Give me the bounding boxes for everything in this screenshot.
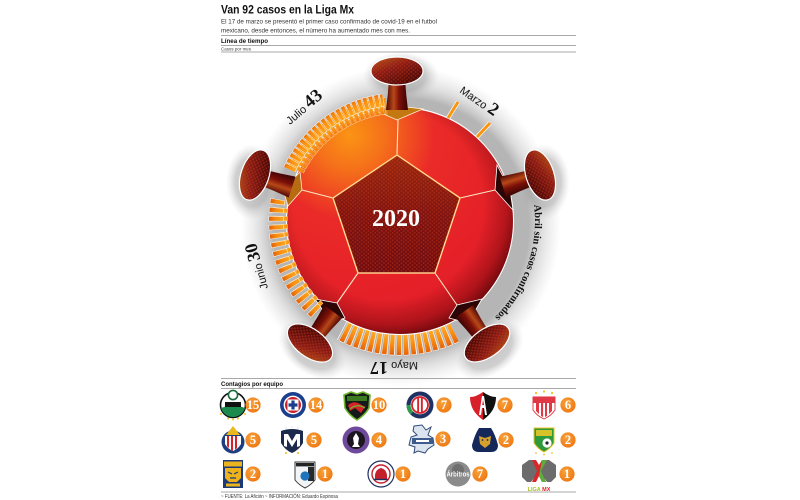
- team: Árbitros 7: 7: [477, 467, 483, 481]
- bottom right junction patch: [449, 299, 482, 323]
- team: Árbitros 7: [446, 462, 488, 486]
- team: Liga MX 1: LIGA MX: [528, 487, 551, 493]
- team: Puebla 3: 3: [440, 432, 446, 446]
- ticks: Marzo 2 cases: [448, 102, 490, 137]
- virus spike: left: [234, 146, 300, 212]
- section heading: teams: Contagios por equipo: [221, 381, 283, 388]
- team: Santos 15: [220, 390, 261, 420]
- virus spike: bottom left: [281, 296, 354, 370]
- label: Mayo 17: Mayo 17: [370, 358, 418, 378]
- ball shadow: [226, 52, 570, 392]
- intro text: mexicano, desde entonces, el número ha aumentado mes con mes.: [221, 28, 410, 34]
- pentagon texture: [333, 155, 460, 273]
- team: Cruz Azul 14: [280, 392, 324, 418]
- year: 2020: [372, 206, 420, 232]
- team: Atlas 7: [470, 392, 513, 420]
- right junction patch: [495, 165, 513, 210]
- virus spike: bottom right: [443, 296, 516, 369]
- team section rules: [221, 378, 576, 492]
- header rules: [221, 36, 576, 52]
- team: Toluca 7: [406, 392, 452, 418]
- soccer ball: [283, 106, 514, 334]
- team: Tigres 2: 2: [250, 467, 256, 481]
- team: León 2: [534, 428, 576, 455]
- seams: [302, 120, 495, 305]
- footer source: ~ FUENTE: La Afición ~ INFORMACIÓN: Eduardo Espinosa: [221, 493, 338, 500]
- ticks: Junio 30 cases: [276, 199, 319, 315]
- team: Tigres 2: [223, 460, 261, 488]
- team: Chivas 5: [222, 426, 261, 454]
- team: Querétaro 1: [295, 462, 333, 488]
- top junction patch: [372, 106, 423, 120]
- team: Cruz Azul 14: 14: [310, 398, 323, 412]
- left junction patch: [283, 172, 302, 206]
- team: Puebla 3: [409, 425, 451, 453]
- team: Atlético San Luis 1: 1: [400, 467, 406, 481]
- virus spike: right: [495, 146, 561, 212]
- virus spike: top: [371, 57, 423, 110]
- section subheading: Casos por mes: [221, 46, 252, 52]
- bottom left junction patch: [315, 299, 345, 322]
- team: Chivas 5: 5: [250, 433, 256, 447]
- team: Monterrey 5: 5: [311, 433, 317, 447]
- label: Abril sin casos confirmados: Abril sin casos confirmados: [496, 205, 542, 320]
- team: Mazatlán 4: 4: [376, 433, 383, 447]
- label: Marzo 2: Marzo 2: [457, 79, 503, 120]
- team: Atlético San Luis 1: [368, 461, 411, 487]
- team: León 2: 2: [565, 433, 571, 447]
- team: Árbitros 7: Árbitros: [446, 470, 470, 478]
- intro text: El 17 de marzo se presentó el primer caso confirmado de covid-19 en el futbol: [221, 18, 438, 26]
- team: Pumas 2: [472, 428, 514, 452]
- team: Juárez 10: [344, 392, 387, 420]
- team: Atlas 7: 7: [502, 398, 508, 412]
- team: Querétaro 1: 1: [322, 467, 328, 481]
- ticks: Julio 43 cases: [289, 100, 386, 170]
- central pentagon: [333, 155, 460, 273]
- team: Necaxa 6: [533, 390, 576, 419]
- team: Necaxa 6: 6: [565, 398, 571, 412]
- title: Van 92 casos en la Liga Mx: [221, 4, 354, 16]
- team: Liga MX 1: [522, 460, 575, 493]
- team: Toluca 7: 7: [441, 398, 447, 412]
- team: Monterrey 5: [281, 426, 322, 454]
- ticks: Mayo 17 cases: [342, 330, 454, 345]
- section heading: timeline: Línea de tiempo: [221, 38, 268, 45]
- team: Mazatlán 4: [342, 426, 387, 454]
- label: Julio 43: Julio 43: [280, 85, 326, 128]
- team: Santos 15: 15: [247, 398, 259, 412]
- team: Liga MX 1: 1: [564, 467, 570, 481]
- label: Junio 30: Junio 30: [240, 241, 272, 292]
- ball rim shading: [287, 108, 513, 334]
- team: Juárez 10: 10: [373, 398, 385, 412]
- ball body: [286, 108, 514, 334]
- intro text: [221, 18, 438, 34]
- team: Pumas 2: 2: [503, 433, 509, 447]
